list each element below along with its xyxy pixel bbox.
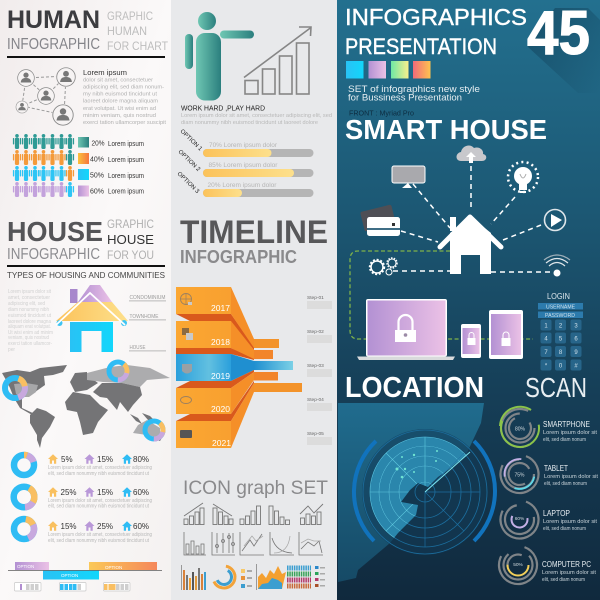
login form: PASSWORD bbox=[545, 313, 575, 319]
text block: lorem ipsum: adipiscing elit, sed diam nonum- bbox=[83, 84, 164, 90]
chart: rising bars with arrow bbox=[244, 27, 311, 94]
scan item: smartphone: elit, sed diam nonum bbox=[543, 437, 586, 443]
donut: russia bbox=[105, 358, 131, 384]
scan item: computer pc bbox=[494, 541, 596, 589]
text block: lorem ipsum: minim veniam, quis nostrud bbox=[83, 113, 156, 119]
scan item: smartphone: Lorem ipsum dolor sit bbox=[543, 430, 597, 436]
text block: housing description: diam nonummy nibh bbox=[8, 307, 49, 313]
laptop bbox=[357, 299, 455, 360]
text block: housing description: Ut wisi enim ad minim bbox=[8, 330, 53, 336]
text block: lorem ipsum: dolor sit amet, consectetuer bbox=[83, 78, 153, 84]
login form: 7 bbox=[544, 350, 548, 356]
text block: housing description: veniam, quis nostrud bbox=[8, 335, 49, 341]
scan item: laptop bbox=[495, 495, 597, 544]
panel: work hard bbox=[176, 12, 332, 197]
text block: lorem ipsum: laoreet dolore magna aliquam bbox=[83, 98, 158, 104]
step labels bbox=[307, 295, 332, 445]
login form: * bbox=[545, 364, 548, 370]
text block: housing description: euismod tincidunt ut bbox=[8, 313, 52, 319]
title bbox=[345, 4, 527, 59]
title: PRESENTATION bbox=[345, 34, 497, 59]
icon: credit cards bbox=[360, 204, 400, 236]
big number 45: 45 bbox=[527, 0, 590, 68]
statistics row 1: 15% bbox=[97, 455, 113, 464]
donut: australia bbox=[141, 417, 167, 443]
statistics row 2: elit, sed diam nonummy nibh euismod tincidunt ut bbox=[48, 504, 149, 510]
option tabs bbox=[8, 562, 162, 580]
login form: 2 bbox=[559, 324, 563, 330]
heading: icon graph set: ICON graph SET bbox=[183, 478, 328, 499]
multicolor bar chart bbox=[181, 565, 206, 590]
europe bbox=[70, 372, 98, 392]
house labels: HOUSE bbox=[130, 345, 146, 351]
statistics row 2: 60% bbox=[133, 488, 149, 497]
scan item: computer pc: 50% bbox=[513, 562, 524, 568]
scan item: computer pc: elit, sed diam nonum bbox=[542, 577, 585, 583]
scan item: tablet: TABLET bbox=[544, 464, 568, 473]
option progress bars: 20% Lorem ipsum dolor bbox=[208, 182, 277, 189]
login form: 8 bbox=[559, 350, 563, 356]
islands bbox=[130, 413, 165, 441]
legend: Lorem ipsum bbox=[108, 188, 144, 196]
step labels: Step-05 bbox=[307, 431, 324, 437]
statistics row 1: 80% bbox=[133, 455, 149, 464]
option progress bars: 85% Lorem ipsum dolor bbox=[208, 162, 278, 169]
scan item: smartphone: SMARTPHONE bbox=[543, 420, 590, 429]
block 2018: 2018 bbox=[211, 337, 230, 347]
scan item: smartphone: 80% bbox=[515, 426, 526, 432]
scan item: laptop: LAPTOP bbox=[543, 509, 570, 518]
block 2018 bbox=[176, 321, 254, 360]
heading: house bbox=[7, 216, 154, 263]
africa bbox=[65, 392, 108, 435]
legend: 50% bbox=[90, 172, 104, 180]
option progress bars: OPTION 3 bbox=[176, 171, 200, 195]
panel: timeline bbox=[176, 214, 332, 448]
legend: 20% bbox=[92, 140, 104, 148]
statistics row 1: elit, sed diam nonummy nibh euismod tincidunt ut bbox=[48, 471, 149, 477]
option progress bars: 70% Lorem ipsum dolor bbox=[209, 142, 278, 149]
long shadow of 45 bbox=[528, 8, 600, 93]
heading: human: GRAPHIC bbox=[107, 9, 153, 23]
heading: human bbox=[7, 6, 169, 53]
step labels: Step-01 bbox=[307, 295, 324, 301]
login form: LOGIN bbox=[547, 292, 570, 301]
subheading: infographic: INFOGRAPHIC bbox=[180, 247, 297, 267]
scan item: tablet: elit, sed diam nonum bbox=[544, 481, 587, 487]
option progress bars: OPTION 1 bbox=[179, 129, 203, 153]
legend: 40% bbox=[90, 156, 104, 164]
heading: human: FOR CHART bbox=[107, 39, 169, 53]
statistics row 1 bbox=[11, 452, 152, 478]
row of colored charts bbox=[181, 564, 325, 590]
heading: human: HUMAN bbox=[107, 24, 147, 38]
text block: work hard: Lorem ipsum dolor sit amet, consectetuer adipiscing elit, sed bbox=[181, 113, 332, 119]
donut: north america bbox=[2, 375, 28, 401]
statistics row 3: Lorem ipsum dolor sit amet, consectetuer adipiscing bbox=[48, 532, 152, 538]
scan item: computer pc: COMPUTER PC bbox=[542, 560, 591, 569]
people pictogram chart bbox=[287, 566, 325, 587]
house labels bbox=[129, 295, 166, 351]
text block: work hard: diam nonummy nibh euismod tincidunt ut laoreet dolore bbox=[181, 120, 318, 126]
network diagram of people bbox=[16, 67, 76, 126]
icon: light bulb bbox=[508, 162, 538, 193]
icon: wifi bbox=[544, 255, 570, 276]
login form: 9 bbox=[574, 350, 578, 356]
block 2019: 2019 bbox=[211, 371, 230, 381]
scan item: tablet: 75% bbox=[514, 472, 525, 478]
panel: house infographic bbox=[2, 216, 170, 591]
australia bbox=[133, 420, 160, 438]
block 2019 bbox=[176, 354, 254, 381]
panel: presentation header bbox=[345, 0, 600, 118]
legend bbox=[78, 137, 144, 196]
text block: housing description: Lorem ipsum dolor sit bbox=[8, 289, 51, 295]
heading: human: INFOGRAPHIC bbox=[7, 36, 100, 53]
row of line chart icons bbox=[184, 532, 323, 555]
statistics row 1: 5% bbox=[61, 455, 73, 464]
statistics row 2: Lorem ipsum dolor sit amet, consectetuer adipiscing bbox=[48, 498, 152, 504]
login form: 5 bbox=[559, 336, 563, 342]
login form: 0 bbox=[559, 364, 563, 370]
option tabs: OPTION bbox=[61, 573, 78, 578]
panel: icon graph set bbox=[181, 478, 328, 590]
battery indicators bbox=[14, 582, 130, 591]
statistics row 1: Lorem ipsum dolor sit amet, consectetuer adipiscing bbox=[48, 465, 152, 471]
scan item: tablet bbox=[495, 450, 598, 498]
heading: smart house: SMART HOUSE bbox=[345, 114, 547, 145]
block 2020: 2020 bbox=[211, 404, 230, 414]
heading: house: HOUSE bbox=[107, 232, 154, 247]
world map bbox=[2, 358, 170, 448]
step labels: Step-02 bbox=[307, 329, 324, 335]
block 2021: 2021 bbox=[212, 438, 231, 448]
option tabs: OPTION bbox=[105, 565, 122, 570]
login form: 1 bbox=[544, 324, 548, 330]
text block: housing description: amet, consectetuer bbox=[8, 295, 50, 301]
heading: human: HUMAN bbox=[7, 6, 100, 34]
option progress bars: OPTION 2 bbox=[177, 149, 201, 173]
panel: location radar bbox=[338, 372, 598, 589]
statistics row 3: 60% bbox=[133, 522, 149, 531]
scan item: tablet: Lorem ipsum dolor sit bbox=[544, 474, 598, 480]
login form: 4 bbox=[544, 336, 548, 342]
title: INFOGRAPHICS bbox=[345, 4, 527, 30]
heading: house: HOUSE bbox=[7, 216, 103, 247]
text block: housing description: adipiscing elit, sed bbox=[8, 301, 45, 307]
text block: lorem ipsum bbox=[83, 68, 166, 126]
icon: layered house bbox=[56, 285, 128, 352]
text block: lorem ipsum: Lorem ipsum bbox=[83, 68, 127, 77]
step labels: Step-03 bbox=[307, 363, 324, 369]
login form: 3 bbox=[574, 324, 578, 330]
row of bar icons bbox=[184, 503, 323, 524]
scan item: laptop: elit, sed diam nonum bbox=[543, 526, 586, 532]
scan item: smartphone bbox=[494, 402, 597, 454]
text block: lorem ipsum: my nibh euismod tincidunt ut bbox=[83, 92, 157, 98]
heading: house: GRAPHIC bbox=[107, 217, 154, 231]
block 2017: 2017 bbox=[211, 303, 230, 313]
green dashed connector bbox=[350, 251, 533, 339]
icon: monitor bbox=[392, 166, 425, 188]
panel: smart house bbox=[345, 114, 583, 370]
russia bbox=[87, 365, 170, 387]
option tabs: OPTION bbox=[17, 564, 34, 569]
subtitle: SET of infographics new style bbox=[348, 84, 480, 95]
text block: lorem ipsum: exerci tation ullamcorper suscipit bbox=[83, 120, 166, 126]
icon: cloud upload bbox=[456, 145, 486, 163]
subtitle: for Bussiness Presentation bbox=[348, 92, 462, 104]
scan item: laptop: Lorem ipsum dolor sit bbox=[543, 519, 597, 525]
scan item: computer pc: Lorem ipsum dolor sit bbox=[542, 570, 596, 576]
heading: house: FOR YOU bbox=[107, 248, 154, 262]
dashed connectors bbox=[393, 166, 551, 272]
step labels: Step-04 bbox=[307, 397, 324, 403]
statistics row 3 bbox=[11, 516, 152, 544]
text block: housing description: per bbox=[8, 347, 15, 353]
heading: timeline: TIMELINE bbox=[180, 214, 328, 250]
block 2020 bbox=[176, 370, 254, 414]
text block: work hard bbox=[181, 104, 332, 126]
text block: housing description: aliquam erat volutpat. bbox=[8, 324, 51, 330]
radar bbox=[354, 429, 495, 555]
heading: house: INFOGRAPHIC bbox=[7, 246, 100, 263]
option progress bars bbox=[176, 129, 314, 197]
login form: # bbox=[574, 364, 578, 370]
statistics row 2: 15% bbox=[97, 488, 113, 497]
chart legend bbox=[241, 569, 252, 588]
text block: lorem ipsum: erat volutpat. Ut wisi enim ad bbox=[83, 106, 156, 112]
subtitle bbox=[348, 84, 480, 104]
house labels: CONDOMINIUM bbox=[130, 295, 166, 301]
login form: USERNAME bbox=[546, 304, 575, 310]
block 2021 bbox=[176, 381, 254, 448]
icon: play button bbox=[544, 210, 566, 230]
login form bbox=[538, 292, 583, 370]
north america bbox=[2, 365, 67, 416]
area chart bbox=[256, 564, 286, 590]
icon: pointing person bbox=[185, 12, 254, 100]
statistics row 3: 25% bbox=[97, 522, 113, 531]
statistics row 3: 15% bbox=[60, 522, 77, 531]
tablet bbox=[489, 310, 523, 359]
legend: Lorem ipsum bbox=[108, 173, 144, 180]
concentric rings chart bbox=[211, 564, 237, 590]
legend: Lorem ipsum bbox=[108, 141, 144, 148]
panel: human infographic bbox=[7, 6, 169, 197]
house labels: TOWNHOME bbox=[130, 314, 159, 320]
icon: gears bbox=[370, 258, 397, 275]
subheading: TYPES OF HOUSING AND COMMUNITIES bbox=[7, 270, 165, 280]
legend: Lorem ipsum bbox=[108, 157, 144, 164]
map shape bbox=[338, 403, 484, 582]
text block: housing description: laoreet dolore magna bbox=[8, 319, 51, 325]
icon: house bbox=[440, 217, 501, 274]
text block: housing description: exerci tation ullamcor- bbox=[8, 341, 52, 347]
block 2017 bbox=[176, 287, 254, 350]
statistics row 2 bbox=[10, 483, 152, 511]
step bars bbox=[254, 339, 302, 392]
south america bbox=[30, 408, 55, 448]
asia bbox=[93, 383, 142, 412]
font note: FRONT : Myriad Pro bbox=[349, 110, 414, 118]
statistics row 2: 25% bbox=[60, 488, 77, 497]
phone bbox=[461, 324, 481, 358]
statistics row 3: elit, sed diam nonummy nibh euismod tincidunt ut bbox=[48, 538, 149, 544]
text block: work hard: WORK HARD ,PLAY HARD bbox=[181, 104, 266, 112]
heading: location: LOCATION bbox=[345, 372, 484, 404]
colour swatches bbox=[346, 61, 430, 78]
legend: 60% bbox=[90, 188, 104, 196]
text block: housing description bbox=[8, 289, 53, 353]
pictogram chart of people bbox=[13, 134, 74, 197]
scan item: laptop: 60% bbox=[515, 516, 525, 522]
login form: 6 bbox=[574, 336, 578, 342]
